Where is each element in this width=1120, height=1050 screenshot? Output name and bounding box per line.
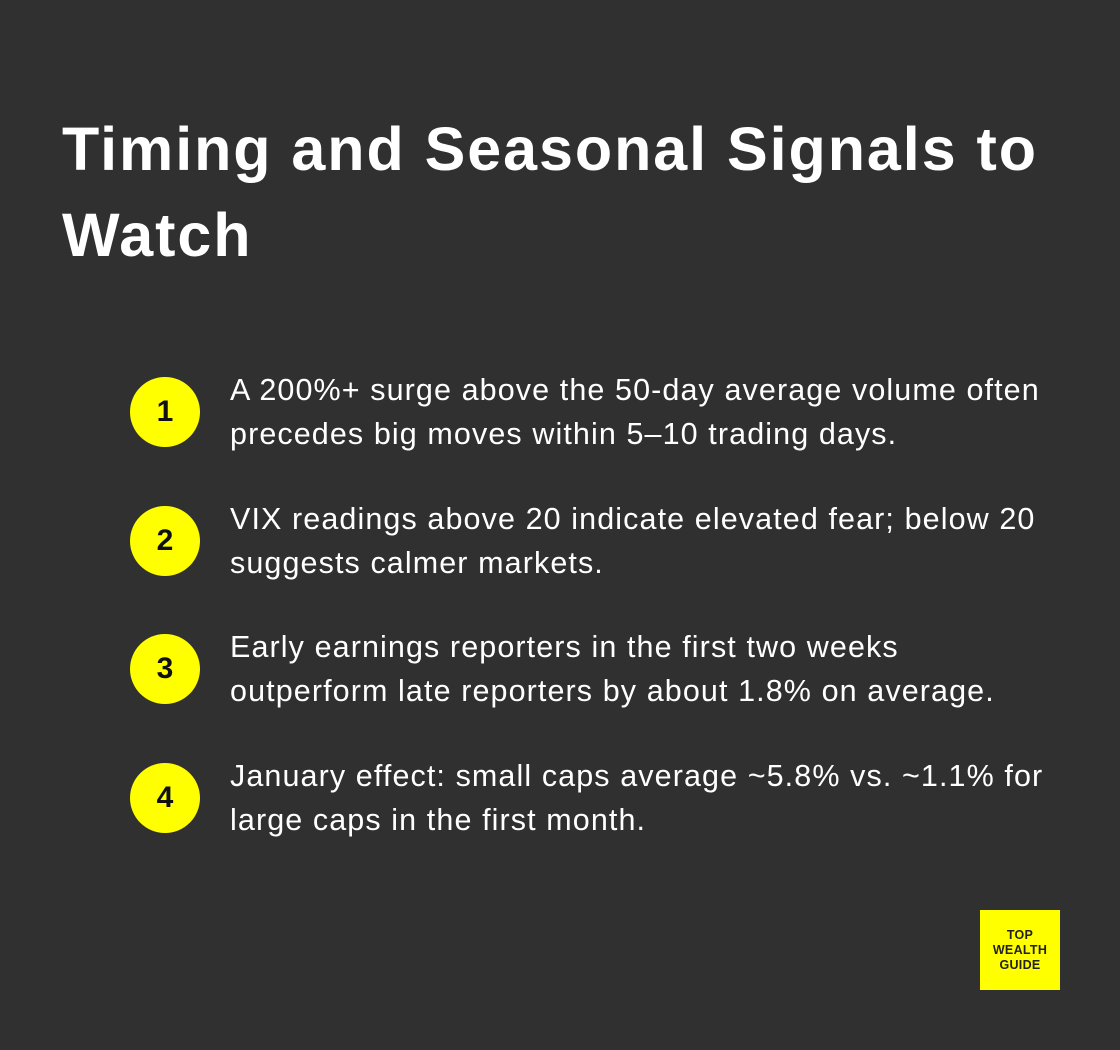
number badge 4 (130, 763, 200, 833)
title: Timing and Seasonal Signals to Watch (62, 115, 1038, 269)
text 3: Early earnings reporters in the first two weeks (230, 630, 899, 664)
text 3: outperform late reporters by about 1.8% on average. (230, 674, 995, 708)
number badge 3 (130, 634, 200, 704)
item 1 (130, 373, 1040, 451)
number badge 1 (130, 377, 200, 447)
item 4 (130, 759, 1043, 837)
number badge 4: 4 (157, 781, 173, 814)
logo (980, 910, 1060, 990)
number badge 3: 3 (157, 652, 173, 685)
item 2 (130, 502, 1035, 580)
text 3 (230, 630, 995, 708)
number badge 2: 2 (157, 524, 173, 557)
text 2: VIX readings above 20 indicate elevated fear; below 20 suggests calmer markets. (230, 502, 1035, 580)
text 4: January effect: small caps average ~5.8% vs. ~1.1% for (230, 759, 1043, 793)
text 4 (230, 759, 1043, 837)
logo: TOP (1007, 928, 1033, 942)
text 4: large caps in the first month. (230, 803, 646, 837)
number badge 2 (130, 506, 200, 576)
text 1: A 200%+ surge above the 50-day average volume often precedes big moves within 5–10 trading days. (230, 373, 1040, 451)
item 3 (130, 630, 995, 708)
logo: WEALTH (993, 942, 1047, 956)
logo: GUIDE (999, 958, 1041, 972)
number badge 1: 1 (157, 395, 173, 428)
